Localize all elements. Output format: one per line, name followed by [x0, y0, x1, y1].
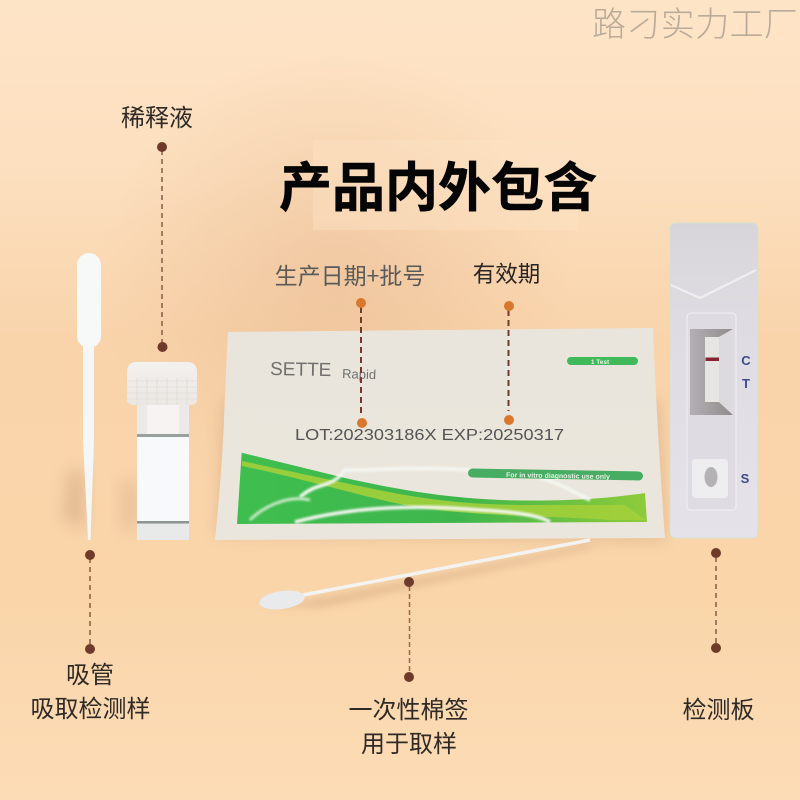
label: pipette: 吸取检测样 — [30, 689, 150, 724]
cassette body — [670, 223, 758, 538]
cassette letters: S — [741, 471, 750, 486]
label: pipette: 吸管 — [66, 655, 114, 690]
label: test cassette: 检测板 — [682, 690, 754, 725]
cassette letters — [741, 353, 751, 486]
pouch brand text: Rapid — [342, 366, 376, 382]
callout line: diluent — [157, 142, 168, 352]
cassette recessed frame — [687, 313, 736, 510]
pouch lot and expiry text: LOT:202303186X EXP:20250317 — [295, 427, 564, 444]
cassette upper chevron — [671, 270, 756, 298]
icon: cotton swab — [258, 540, 590, 612]
pouch badge: 1 test — [567, 357, 638, 366]
pouch brand text — [270, 359, 376, 382]
label: expiry date: 有效期 — [473, 257, 540, 289]
callout line: swab — [404, 577, 414, 682]
panel: foil pouch — [215, 328, 665, 540]
pouch badge: 1 test: 1 Test — [591, 359, 610, 366]
label: disposable swab — [348, 690, 468, 759]
cassette letters: T — [742, 376, 750, 391]
pouch badge: in vitro use — [468, 468, 643, 481]
pouch badge: in vitro use: For in vitro diagnostic use only — [506, 472, 610, 481]
label: disposable swab: 用于取样 — [361, 724, 457, 759]
icon: test cassette — [670, 223, 758, 538]
icon: pipette — [62, 253, 101, 540]
label: diluent: 稀释液 — [121, 98, 193, 133]
cassette letters: C — [741, 353, 751, 368]
result window — [690, 329, 733, 415]
label: disposable swab: 一次性棉签 — [348, 690, 468, 725]
pouch body — [215, 328, 665, 540]
callout line: pipette — [85, 550, 95, 654]
label: production date and lot number: 生产日期+批号 — [275, 257, 425, 291]
callout line: expiry date — [504, 301, 514, 425]
pouch green band — [237, 453, 647, 524]
icon: diluent vial — [120, 362, 197, 540]
callout line: cassette — [711, 548, 721, 653]
sample well — [692, 459, 728, 498]
pouch brand text: SETTE — [270, 359, 332, 381]
title: 产品内外包含 — [279, 146, 597, 222]
label: pipette — [30, 655, 150, 724]
callout line: lot number — [356, 298, 367, 428]
